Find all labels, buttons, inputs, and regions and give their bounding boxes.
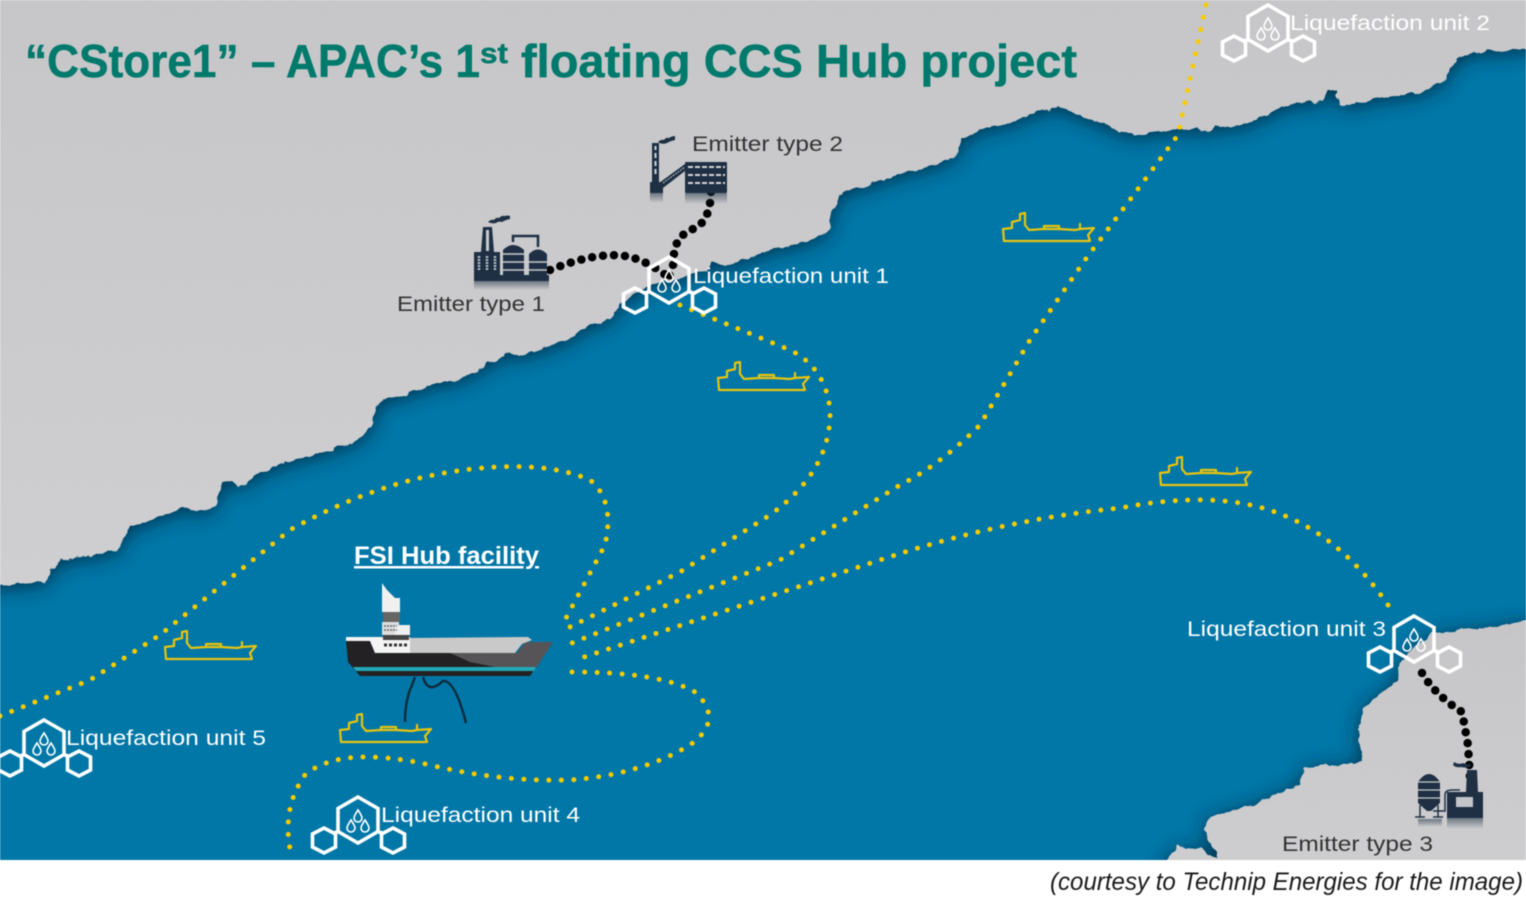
label: liquefaction unit 2: Liquefaction unit 2 — [1290, 11, 1490, 35]
label: emitter type 3: Emitter type 3 — [1282, 832, 1433, 856]
label: liquefaction unit 3: Liquefaction unit 3 — [1187, 617, 1386, 641]
heading: FSI Hub facility: FSI Hub facility — [354, 542, 539, 570]
title: floating CCS Hub project — [521, 35, 1077, 87]
icon: LNG carrier near unit 1 route — [718, 362, 809, 390]
icon: liquefaction unit 2 — [1222, 5, 1314, 61]
CO2 pipeline: emitter 3 to unit 3 — [1422, 673, 1470, 778]
icon: liquefaction unit 1 — [624, 257, 716, 313]
icon: LNG carrier near unit 5 route — [165, 631, 256, 659]
route: liquefaction unit 3 to hub — [575, 500, 1388, 660]
icon: liquefaction unit 5 — [0, 720, 90, 776]
route: liquefaction unit 5 to hub — [0, 467, 608, 716]
icon: FSI hub vessel — [346, 583, 553, 723]
caption strip background — [0, 860, 1526, 897]
label: emitter type 2: Emitter type 2 — [692, 132, 843, 156]
icon: LNG carrier near unit 2 route — [1003, 213, 1094, 241]
icon: LNG carrier below hub — [340, 714, 431, 742]
icon: liquefaction unit 4 — [312, 797, 404, 853]
route: liquefaction unit 4 to hub — [288, 672, 709, 858]
route: liquefaction unit 2 to hub — [572, 5, 1206, 643]
route: liquefaction unit 1 to hub — [568, 305, 830, 628]
label: liquefaction unit 5: Liquefaction unit 5 — [66, 726, 266, 750]
icon: LNG carrier near unit 3 route — [1160, 457, 1251, 485]
land: northern coastline — [0, 0, 1526, 587]
title — [25, 35, 1077, 87]
CO2 pipeline: emitter 1 to unit 1 — [550, 255, 672, 280]
icon: emitter type 1 plant — [474, 216, 549, 290]
label: liquefaction unit 1: Liquefaction unit 1 — [693, 264, 889, 288]
label: emitter type 1: Emitter type 1 — [397, 292, 545, 316]
title: st — [480, 38, 508, 70]
CO2 pipeline: emitter 2 to unit 1 — [668, 192, 711, 280]
icon: emitter type 2 plant — [650, 136, 727, 204]
label: liquefaction unit 4: Liquefaction unit 4 — [381, 803, 580, 827]
title: “CStore1” – APAC’s 1 — [25, 35, 480, 87]
icon: liquefaction unit 3 — [1368, 616, 1460, 672]
land: south-eastern coastline — [1163, 618, 1526, 897]
icon: emitter type 3 plant — [1415, 762, 1483, 829]
